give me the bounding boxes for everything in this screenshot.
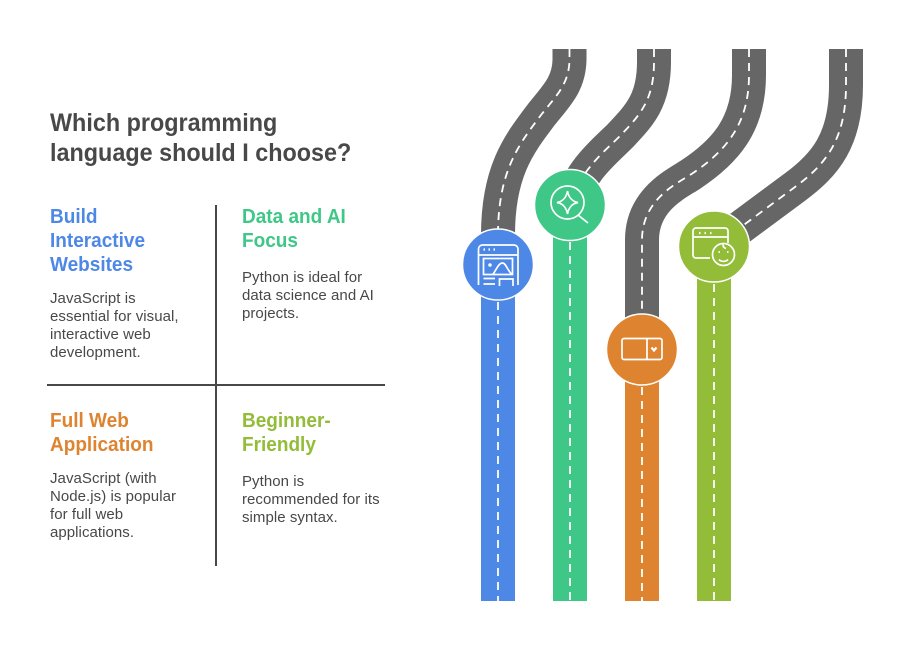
- heading: beginner-friendly: Friendly: [242, 434, 316, 456]
- text: javascript node: Node.js) is popular: [50, 488, 176, 505]
- icon: orange dropdown badge: [606, 314, 678, 385]
- text: python simple syntax: simple syntax.: [242, 509, 338, 526]
- text: python simple syntax: [242, 473, 380, 526]
- panel: data and ai focus: [242, 206, 374, 322]
- text: python data science: Python is ideal for: [242, 269, 362, 286]
- heading: build interactive websites: Websites: [50, 254, 133, 276]
- heading: build interactive websites: Build: [50, 206, 98, 228]
- icon: green search badge: [534, 170, 606, 240]
- text: javascript web development: development.: [50, 344, 141, 361]
- road: green path: [553, 49, 654, 601]
- text: javascript node: for full web: [50, 506, 123, 523]
- road: lime path: [697, 49, 846, 601]
- heading: beginner-friendly: Beginner-: [242, 410, 331, 432]
- text: python data science: projects.: [242, 305, 299, 322]
- panel: beginner-friendly: [242, 410, 380, 526]
- text: javascript node: [50, 470, 176, 541]
- text: python simple syntax: recommended for its: [242, 491, 380, 508]
- heading: build interactive websites: Interactive: [50, 230, 145, 252]
- text: python simple syntax: Python is: [242, 473, 304, 490]
- panel: build interactive websites: [50, 206, 179, 361]
- panel: full web application: [50, 410, 176, 541]
- title: language should I choose?: [50, 139, 351, 167]
- title: Which programming: [50, 109, 277, 137]
- text: javascript web development: JavaScript is: [50, 290, 136, 307]
- heading: build interactive websites: [50, 206, 145, 276]
- heading: data and ai focus: [242, 206, 346, 252]
- heading: data and ai focus: Focus: [242, 230, 298, 252]
- heading: full web application: Application: [50, 434, 153, 456]
- heading: beginner-friendly: [242, 410, 331, 456]
- text: python data science: data science and AI: [242, 287, 374, 304]
- icon: blue website badge: [462, 229, 534, 300]
- heading: full web application: Full Web: [50, 410, 129, 432]
- text: python data science: [242, 269, 374, 322]
- heading: data and ai focus: Data and AI: [242, 206, 346, 228]
- text: javascript web development: essential for visual,: [50, 308, 179, 325]
- text: javascript node: applications.: [50, 524, 134, 541]
- road: blue path: [481, 49, 570, 601]
- title: [50, 109, 351, 167]
- text: javascript node: JavaScript (with: [50, 470, 157, 487]
- text: javascript web development: [50, 290, 179, 361]
- road: orange path: [625, 49, 749, 601]
- heading: full web application: [50, 410, 153, 456]
- icon: lime browser face badge: [678, 211, 750, 282]
- text: javascript web development: interactive web: [50, 326, 151, 343]
